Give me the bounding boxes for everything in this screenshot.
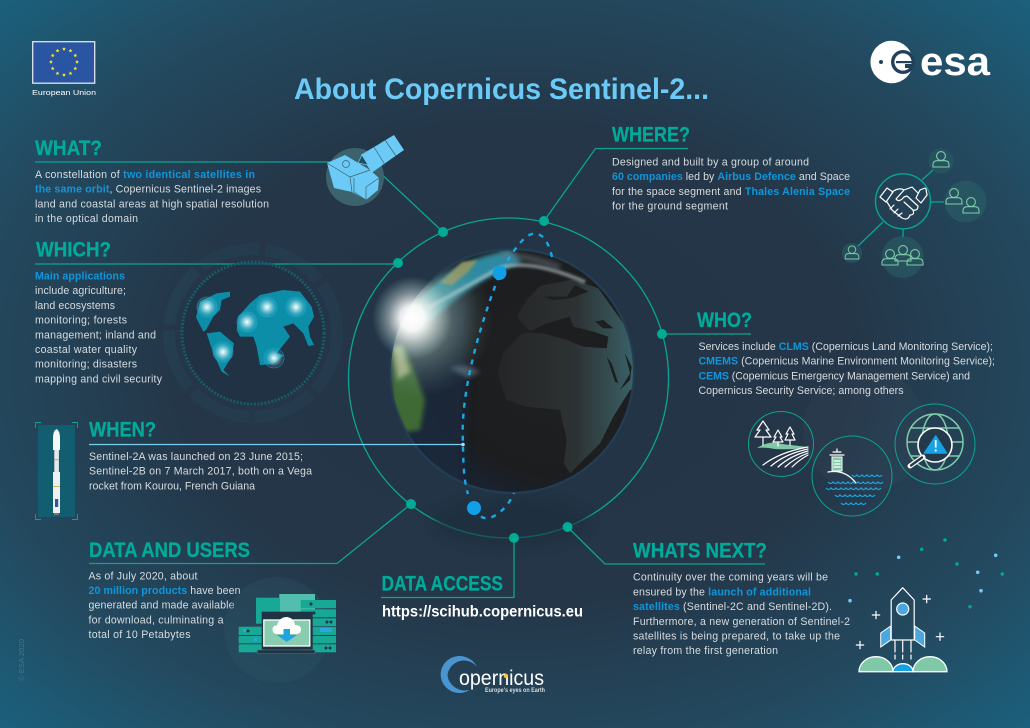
text: data and users: total of 10 Petabytes: [88, 629, 190, 641]
EU logo: European Union: [32, 88, 96, 97]
heading: data access: DATA ACCESS: [382, 572, 503, 596]
text: who: Services include CLMS (Copernicus Land Monitoring Service);: [698, 341, 993, 353]
south america land: [392, 344, 425, 432]
orbit path: [463, 234, 552, 518]
text: whats next: Continuity over the coming years will be: [633, 572, 828, 584]
text: where: Designed and built by a group of around: [612, 156, 809, 168]
ESA logo: [870, 40, 991, 84]
text: which: Main applications: [35, 270, 125, 282]
text: which: management; inland and: [35, 329, 156, 341]
heading: which: WHICH?: [36, 238, 111, 262]
EU logo: [32, 42, 96, 97]
copernicus logo: [441, 656, 545, 694]
text: which: monitoring; forests: [35, 315, 127, 327]
text: which: [35, 270, 163, 385]
panel: when: [36, 418, 463, 520]
text: which: mapping and civil security: [35, 373, 163, 385]
icon: land monitoring: [748, 412, 814, 476]
sunlight wash: [391, 264, 486, 390]
text: what: land and coastal areas at high spatial resolution: [35, 198, 269, 210]
ring nodes: [393, 216, 667, 543]
text: which: land ecosystems: [35, 300, 115, 312]
handshake: [880, 187, 927, 219]
left ocean: [410, 296, 471, 476]
text: who: CEMS (Copernicus Emergency Management Service) and: [698, 370, 970, 382]
heading: when: WHEN?: [89, 418, 156, 442]
text: whats next: [633, 572, 850, 657]
title: About Copernicus Sentinel-2...: [294, 73, 709, 106]
text: when: rocket from Kourou, French Guiana: [89, 480, 255, 492]
ESA logo: esa: [920, 40, 991, 84]
text: where: 60 companies led by Airbus Defence and Space: [612, 171, 850, 183]
text: whats next: satellites (Sentinel-2C and Sentinel-2D).: [633, 601, 832, 613]
earth globe: [374, 248, 635, 539]
url: https://scihub.copernicus.eu: [382, 604, 583, 621]
connector: when: [89, 444, 463, 446]
icon: vega rocket: [36, 422, 78, 520]
heading: where: WHERE?: [612, 122, 690, 146]
icon: partner network: [842, 148, 986, 278]
connector: who: [662, 333, 751, 335]
copyright: © ESA 2020: [17, 639, 26, 681]
heading: data and users: DATA AND USERS: [89, 538, 250, 562]
icon: emergency monitoring: [895, 404, 975, 484]
icon: rocket launch: [848, 538, 1004, 672]
orbit ring: [348, 218, 668, 538]
text: data and users: generated and made available: [88, 600, 235, 612]
connector: which: [35, 263, 398, 265]
background faint circle: [803, 368, 927, 492]
connector: where: [544, 148, 688, 221]
text: what: in the optical domain: [35, 213, 138, 225]
cloud bands: [428, 265, 585, 308]
north polar ocean and land: [418, 250, 524, 320]
text: who: CMEMS (Copernicus Marine Environment Monitoring Service);: [698, 356, 995, 368]
panel: data access: [381, 538, 583, 621]
connector: whats next: [568, 527, 765, 564]
icon: world map: [169, 249, 337, 417]
connector: what: [35, 162, 443, 232]
text: what: the same orbit, Copernicus Sentinel-2 images: [35, 184, 261, 196]
heading: whats next: WHATS NEXT?: [633, 539, 767, 563]
connector: data access: [381, 538, 514, 598]
text: whats next: ensured by the launch of additional: [633, 586, 811, 598]
text: who: [698, 341, 995, 397]
text: where: for the ground segment: [612, 201, 728, 213]
text: where: [612, 156, 850, 213]
text: when: Sentinel-2A was launched on 23 June 2015;: [89, 451, 303, 463]
icon: data servers and laptop: [224, 577, 336, 683]
text: which: include agriculture;: [35, 285, 126, 297]
sun glare: [372, 276, 452, 360]
heading: what: WHAT?: [35, 136, 102, 160]
text: what: [35, 169, 269, 225]
land: Europe and Africa: [508, 280, 633, 473]
heading: who: WHO?: [697, 308, 752, 332]
text: whats next: Furthermore, a new generation of Sentinel-2: [633, 616, 850, 628]
text: which: monitoring; disasters: [35, 359, 137, 371]
copernicus logo: Europe's eyes on Earth: [485, 687, 545, 694]
panel: where: [544, 122, 986, 278]
text: where: for the space segment and Thales Alenia Space: [612, 186, 850, 198]
copernicus logo: opernicus: [459, 667, 544, 690]
panel: data and users: [88, 504, 411, 683]
text: what: A constellation of two identical satellites in: [35, 169, 255, 181]
text: data and users: 20 million products have been: [88, 585, 241, 597]
text: when: [89, 451, 312, 492]
panel: which: [35, 238, 398, 417]
icon: satellite: [326, 135, 404, 206]
text: who: Copernicus Security Service; among others: [698, 385, 904, 397]
text: data and users: [88, 570, 241, 641]
text: whats next: relay from the first generation: [633, 645, 778, 657]
text: when: Sentinel-2B on 7 March 2017, both on a Vega: [89, 466, 312, 478]
connector: data and users: [89, 504, 411, 564]
text: data and users: for download, culminating a: [88, 614, 224, 626]
panel: whats next: [568, 527, 1004, 672]
panel: who: [662, 308, 995, 516]
icon: marine monitoring: [812, 436, 892, 516]
text: which: coastal water quality: [35, 344, 138, 356]
text: data and users: As of July 2020, about: [88, 570, 198, 582]
panel: what: [35, 135, 443, 232]
text: whats next: satellites is being prepared, to take up the: [633, 630, 840, 642]
